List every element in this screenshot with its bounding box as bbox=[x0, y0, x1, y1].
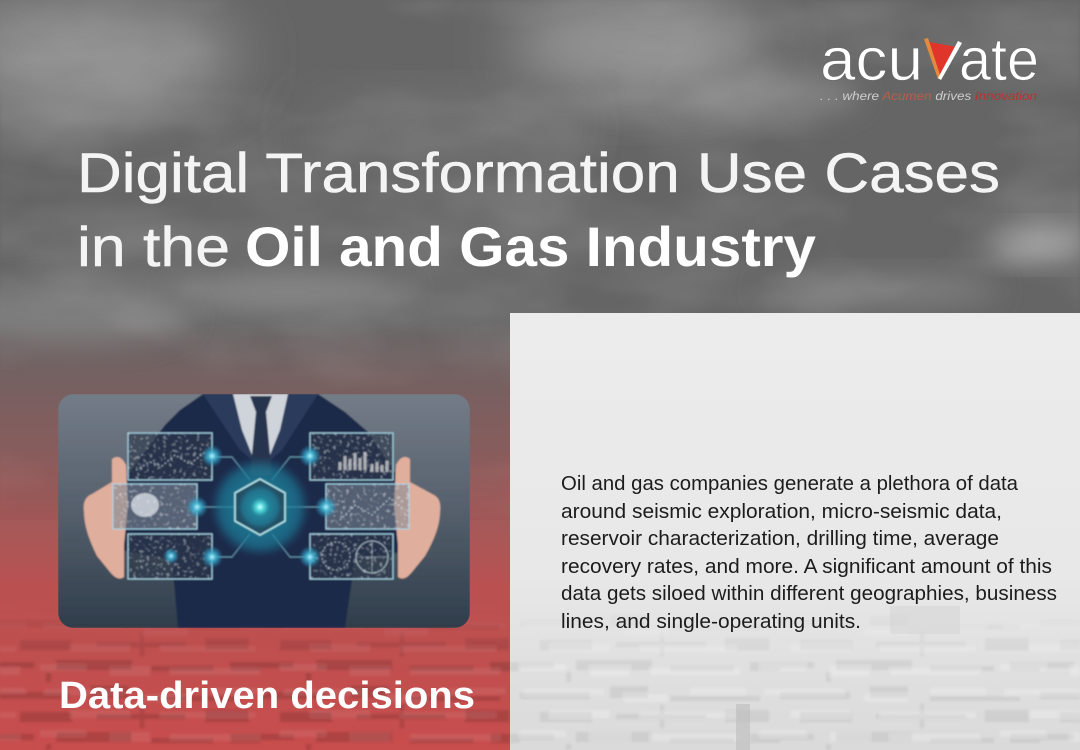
body text: around seismic exploration, micro-seismic data, bbox=[561, 500, 1002, 523]
mini bar chart bbox=[340, 452, 387, 472]
body text: recovery rates, and more. A significant amount of this bbox=[561, 555, 1052, 578]
title bbox=[77, 141, 1000, 278]
suit bbox=[108, 394, 412, 628]
body text bbox=[561, 472, 1057, 633]
title: Oil and Gas Industry bbox=[245, 215, 816, 278]
shirt and tie bbox=[233, 394, 288, 475]
body text: data gets siloed within different geographies, business bbox=[561, 582, 1057, 605]
central glowing hexagon bbox=[210, 457, 310, 557]
dashboard panels bbox=[113, 433, 409, 579]
glow nodes bbox=[163, 445, 337, 568]
body text: reservoir characterization, drilling time, average bbox=[561, 527, 999, 550]
icon: logo red triangle bbox=[924, 38, 962, 80]
logo: acuvate: acu bbox=[820, 26, 923, 93]
title: Digital Transformation Use Cases bbox=[77, 141, 1000, 204]
panel: red gradient left side bbox=[0, 320, 510, 750]
logo: acuvate bbox=[820, 26, 1039, 103]
title: in the bbox=[77, 215, 230, 278]
hands bbox=[84, 457, 440, 579]
connector lines bbox=[197, 457, 326, 557]
dashboard details bbox=[136, 452, 405, 573]
city texture on red panel bbox=[0, 622, 510, 750]
panel: light text panel bbox=[510, 313, 1080, 750]
logo: acuvate: ate bbox=[959, 26, 1039, 93]
subheading: Data-driven decisions bbox=[59, 675, 475, 717]
image: businessman holding digital dashboards bbox=[58, 394, 470, 628]
left photo mini graphic bbox=[131, 493, 159, 517]
body text: lines, and single-operating units. bbox=[561, 610, 861, 633]
lapels bbox=[203, 394, 318, 462]
body text: Oil and gas companies generate a plethora of data bbox=[561, 472, 1019, 495]
logo tagline: . . . where Acumen drives Innovation bbox=[820, 91, 1037, 103]
dashboard speckle bbox=[110, 430, 410, 580]
